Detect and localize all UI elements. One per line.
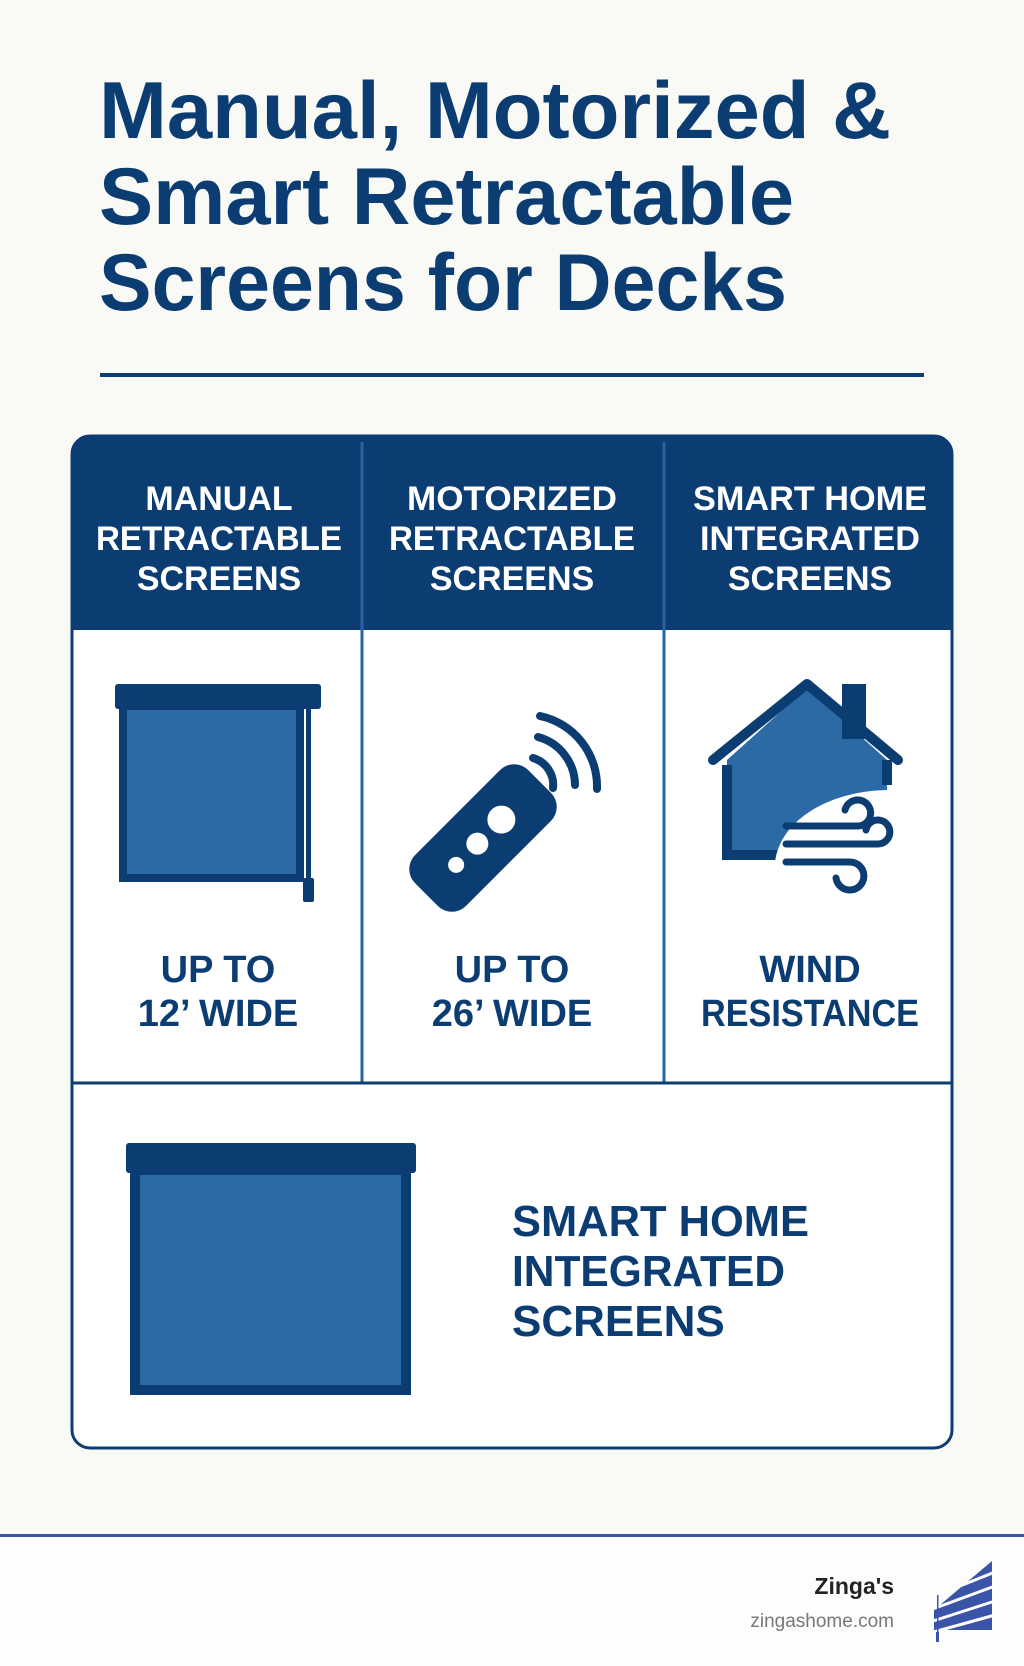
label: up to 26 wide bbox=[432, 949, 592, 1035]
icon: manual roller screen bbox=[115, 684, 321, 902]
icon: remote control bbox=[401, 716, 597, 920]
label: up to 12 wide: UP TO bbox=[161, 949, 275, 991]
label: wind resistance bbox=[701, 949, 919, 1035]
header: motorized: RETRACTABLE bbox=[389, 520, 635, 558]
footer brand text: Zinga's bbox=[814, 1573, 894, 1599]
header: manual: SCREENS bbox=[137, 560, 301, 598]
title: Manual, Motorized & bbox=[99, 66, 891, 156]
panel: comparison table bbox=[72, 436, 952, 1448]
header: smart home: SMART HOME bbox=[693, 480, 927, 518]
header: motorized: SCREENS bbox=[430, 560, 594, 598]
title: Screens for Decks bbox=[99, 238, 787, 328]
header: manual: MANUAL bbox=[145, 480, 293, 518]
header: manual bbox=[96, 480, 342, 598]
footer brand text: zingashome.com bbox=[750, 1611, 894, 1632]
header: manual: RETRACTABLE bbox=[96, 520, 342, 558]
text: smart home integrated screens: INTEGRATED bbox=[512, 1247, 785, 1296]
title bbox=[99, 66, 891, 328]
header: motorized bbox=[389, 480, 635, 598]
text: smart home integrated screens: SCREENS bbox=[512, 1297, 725, 1346]
label: up to 12 wide bbox=[138, 949, 298, 1035]
text: smart home integrated screens bbox=[512, 1197, 809, 1346]
label: wind resistance: WIND bbox=[759, 949, 861, 991]
header band bbox=[72, 436, 952, 630]
icon: blinds logo bbox=[930, 1561, 995, 1642]
header: smart home bbox=[693, 480, 927, 598]
text: smart home integrated screens: SMART HOME bbox=[512, 1197, 809, 1246]
header: smart home: INTEGRATED bbox=[700, 520, 920, 558]
footer bbox=[0, 1534, 1024, 1666]
header: smart home: SCREENS bbox=[728, 560, 892, 598]
label: up to 26 wide: 26’ WIDE bbox=[432, 993, 592, 1035]
footer brand text bbox=[750, 1573, 894, 1632]
header: motorized: MOTORIZED bbox=[407, 480, 617, 518]
label: wind resistance: RESISTANCE bbox=[701, 993, 919, 1035]
icon: house with wind bbox=[713, 684, 900, 890]
label: up to 26 wide: UP TO bbox=[455, 949, 569, 991]
title: Smart Retractable bbox=[99, 152, 794, 242]
icon: large screen bbox=[126, 1143, 416, 1390]
label: up to 12 wide: 12’ WIDE bbox=[138, 993, 298, 1035]
